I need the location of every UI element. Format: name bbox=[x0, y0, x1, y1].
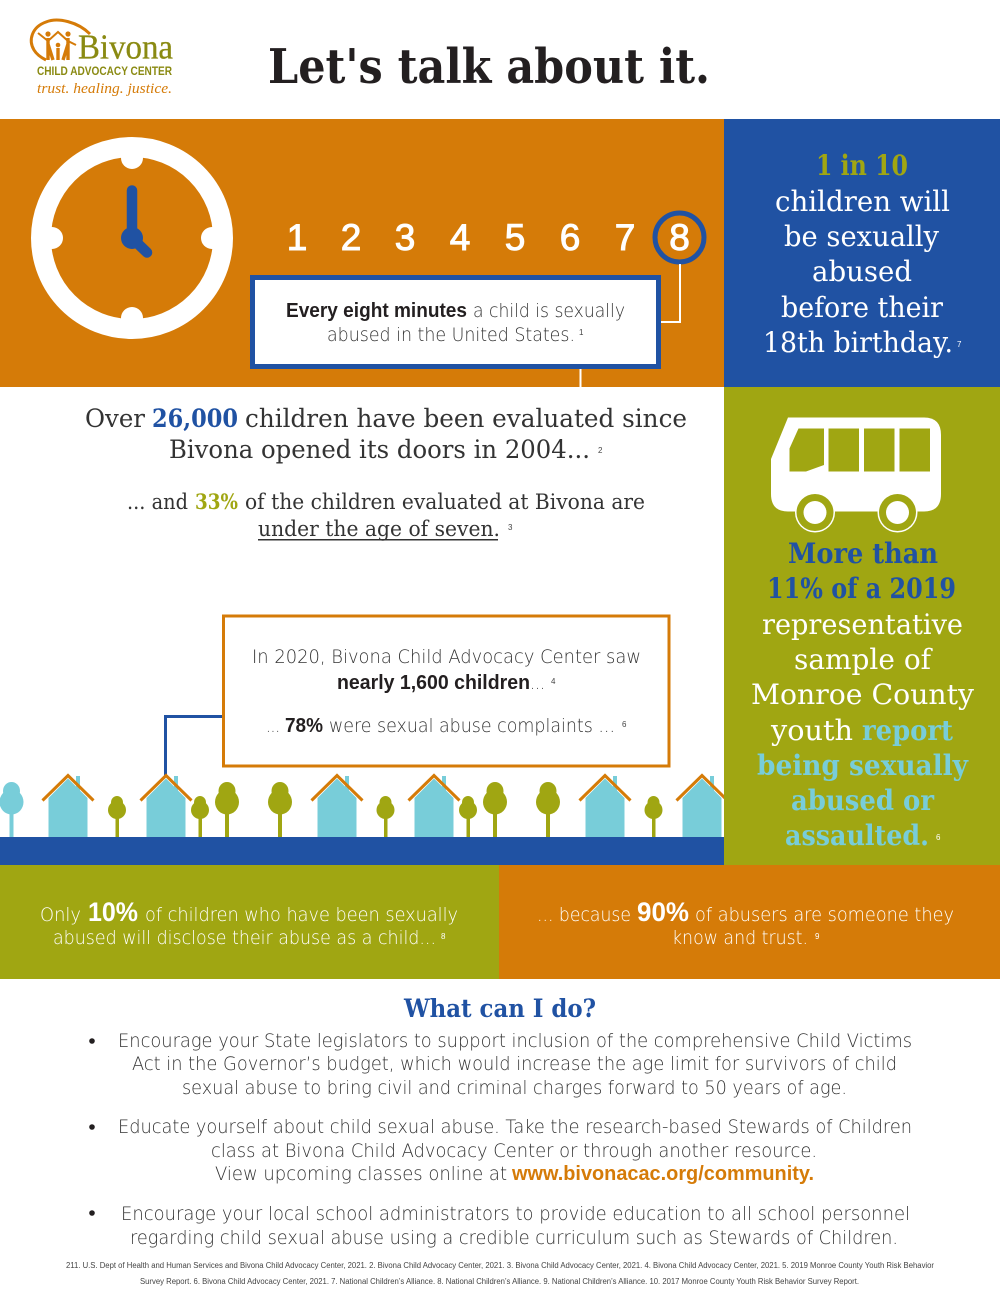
connector from ring to callout bbox=[660, 264, 680, 322]
panel: Monroe County youth (olive): youth bbox=[770, 714, 853, 747]
panel: Monroe County youth (olive): More than bbox=[788, 537, 938, 570]
callout: 2020 children seen bbox=[224, 616, 669, 766]
text block: children evaluated: 33% bbox=[195, 489, 238, 514]
panel: Monroe County youth (olive): Monroe County bbox=[751, 678, 974, 711]
action: school administrators: Encourage your local school administrators to provide education to all school personnel bbox=[121, 1203, 910, 1225]
panel: Monroe County youth (olive): sample of bbox=[794, 643, 934, 676]
action: education: View upcoming classes online at bbox=[215, 1163, 507, 1185]
connector from callout to section below bbox=[580, 369, 582, 387]
callout: 2020 children seen: nearly 1,600 children bbox=[337, 672, 530, 694]
callout: 2020 children seen: ... bbox=[530, 672, 545, 694]
callout: every eight minutes: Every eight minutes bbox=[286, 300, 467, 322]
panel: eight minutes (orange) bbox=[0, 119, 724, 387]
action: education bbox=[89, 1116, 912, 1185]
panel: only 10% disclose (olive): of children who have been sexually bbox=[145, 904, 458, 926]
callout: 2020 children seen: 4 bbox=[551, 677, 556, 686]
connector from callout to house bbox=[166, 716, 222, 776]
panel: Monroe County youth (olive): assaulted. bbox=[785, 819, 929, 852]
action: legislators: Encourage your State legislators to support inclusion of the comprehensive Child Victims bbox=[118, 1030, 912, 1052]
panel: 1 in 10 (blue): children will bbox=[775, 185, 950, 218]
count from one to eight: 5 bbox=[505, 217, 525, 258]
action: legislators bbox=[89, 1030, 912, 1099]
panel: only 10% disclose (olive): Only bbox=[40, 904, 81, 926]
action: school administrators: regarding child sexual abuse using a credible curriculum such as Stewards of Children. bbox=[130, 1227, 898, 1249]
action: education: www.bivonacac.org/community. bbox=[511, 1163, 814, 1185]
panel: 1 in 10 (blue): abused bbox=[812, 255, 912, 288]
text block: children evaluated bbox=[85, 404, 687, 541]
text block: children evaluated: of the children evaluated at Bivona are bbox=[245, 490, 645, 514]
action: education: class at Bivona Child Advocacy Center or through another resource. bbox=[211, 1140, 817, 1162]
panel: 1 in 10 (blue): before their bbox=[781, 291, 944, 324]
callout: every eight minutes bbox=[252, 278, 658, 366]
text block: children evaluated: Bivona opened its doors in 2004... bbox=[169, 435, 590, 464]
footnotes bbox=[66, 1261, 934, 1286]
action: legislators: sexual abuse to bring civil and criminal charges forward to 50 years of age. bbox=[182, 1077, 847, 1099]
logo: Bivona Child Advocacy Center: Bivona bbox=[78, 28, 173, 66]
action: education: Educate yourself about child sexual abuse. Take the research-based Stewards of Children bbox=[118, 1116, 912, 1138]
panel: 90% know abuser (orange) bbox=[499, 865, 1000, 979]
logo: Bivona Child Advocacy Center: trust. healing. justice. bbox=[37, 81, 172, 97]
panel: Monroe County youth (olive): report bbox=[862, 714, 953, 747]
panel: Monroe County youth (olive): representative bbox=[762, 608, 963, 641]
count from one to eight: 4 bbox=[450, 217, 470, 258]
footnotes: 211. U.S. Dept of Health and Human Services and Bivona Child Advocacy Center, 2021. 2. Bivona Child Advocacy Center, 2021. 3. Bivona Child Advocacy Center, 2021. 4. Bivona Child Advocacy Center, 2021. 5. 2019 Monroe County Youth Risk Behavior bbox=[66, 1261, 934, 1270]
panel: only 10% disclose (olive): 10% bbox=[88, 897, 138, 927]
text block: children evaluated: children have been evaluated since bbox=[245, 404, 687, 433]
text block: children evaluated: 26,000 bbox=[152, 404, 238, 433]
panel: 1 in 10 (blue): be sexually bbox=[784, 220, 939, 253]
highlighted number ring bbox=[655, 213, 704, 262]
logo: Bivona Child Advocacy Center bbox=[31, 20, 173, 97]
panel: Monroe County youth (olive): being sexually bbox=[757, 749, 969, 782]
panel: only 10% disclose (olive): 8 bbox=[441, 932, 446, 941]
title: Let's talk about it. bbox=[268, 39, 710, 95]
count from one to eight: 2 bbox=[341, 217, 361, 258]
callout: every eight minutes: a child is sexually bbox=[473, 300, 625, 322]
action: legislators: Act in the Governor’s budget, which would increase the age limit for survivors of child bbox=[132, 1053, 897, 1075]
count from one to eight bbox=[287, 217, 690, 258]
callout: every eight minutes: abused in the United States. bbox=[327, 324, 575, 346]
panel: Monroe County youth (olive): 6 bbox=[936, 833, 941, 842]
panel: only 10% disclose (olive): abused will disclose their abuse as a child... bbox=[53, 927, 436, 949]
panel: 90% know abuser (orange): 9 bbox=[815, 932, 820, 941]
panel: 90% know abuser (orange): know and trust. bbox=[672, 927, 808, 949]
ground bbox=[0, 837, 724, 865]
callout: 2020 children seen: were sexual abuse complaints ... bbox=[329, 715, 615, 737]
panel: 90% know abuser (orange): of abusers are someone they bbox=[695, 904, 954, 926]
callout: 2020 children seen: In 2020, Bivona Child Advocacy Center saw bbox=[252, 646, 641, 668]
count from one to eight: 3 bbox=[395, 217, 415, 258]
count from one to eight: 7 bbox=[615, 217, 635, 258]
trees bbox=[0, 782, 662, 837]
houses bbox=[42, 776, 728, 837]
count from one to eight: 6 bbox=[560, 217, 580, 258]
panel: 90% know abuser (orange): 90% bbox=[637, 897, 689, 927]
icon: bus bbox=[771, 418, 941, 532]
text block: children evaluated: under the age of seven. bbox=[258, 517, 500, 541]
count from one to eight: 1 bbox=[287, 217, 307, 258]
icon: clock bbox=[41, 147, 223, 329]
panel: 90% know abuser (orange): ... because bbox=[537, 904, 631, 926]
count from one to eight: 8 bbox=[669, 217, 690, 258]
action: school administrators bbox=[89, 1203, 910, 1249]
panel: 1 in 10 (blue): 18th birthday. bbox=[763, 326, 953, 359]
footnotes: Survey Report. 6. Bivona Child Advocacy Center, 2021. 7. National Children’s Alliance. 8. National Children’s Alliance. 9. National Children’s Alliance. 10. 2017 Monroe County Youth Risk Behavior Survey Report. bbox=[140, 1277, 859, 1286]
text block: children evaluated: 3 bbox=[508, 523, 513, 532]
panel: Monroe County youth (olive): 11% of a 2019 bbox=[767, 572, 956, 605]
panel: Monroe County youth (olive) bbox=[724, 387, 1000, 865]
panel: 1 in 10 (blue): 1 in 10 bbox=[816, 149, 908, 182]
list: actions bbox=[89, 1030, 912, 1249]
callout: every eight minutes: 1 bbox=[579, 328, 584, 337]
text block: children evaluated: Over bbox=[85, 404, 145, 433]
text block: children evaluated: ... and bbox=[127, 490, 188, 514]
text block: children evaluated: 2 bbox=[598, 446, 603, 455]
heading: What can I do?: What can I do? bbox=[403, 994, 596, 1023]
callout: 2020 children seen: ... bbox=[266, 715, 280, 737]
callout: 2020 children seen: 6 bbox=[622, 720, 627, 729]
logo: Bivona Child Advocacy Center: CHILD ADVOCACY CENTER bbox=[37, 64, 172, 78]
callout: 2020 children seen: 78% bbox=[285, 715, 323, 737]
panel: 1 in 10 (blue) bbox=[724, 119, 1000, 387]
panel: only 10% disclose (olive) bbox=[0, 865, 499, 979]
panel: Monroe County youth (olive): abused or bbox=[791, 784, 935, 817]
panel: 1 in 10 (blue): 7 bbox=[957, 340, 962, 349]
neighbourhood illustration bbox=[0, 776, 728, 865]
